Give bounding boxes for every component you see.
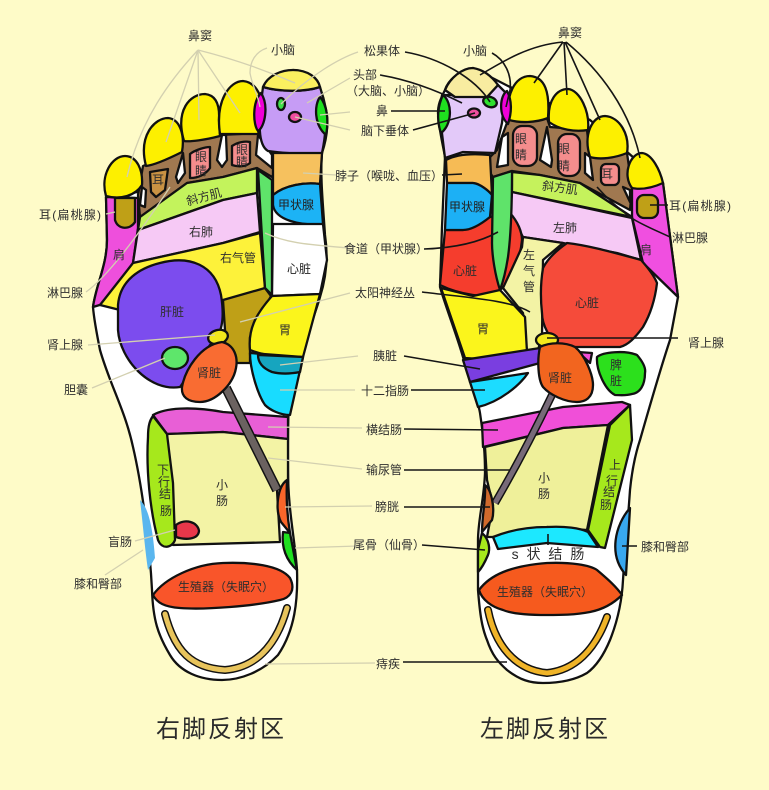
left foot labels: 肾脏 [548,370,572,385]
left foot labels: 管 [523,279,535,294]
eye 1 [190,147,210,178]
center labels: 松果体 [364,44,400,58]
center labels: 尾骨（仙骨） [353,538,425,552]
right foot labels: 肝脏 [160,304,184,319]
heart line [272,224,327,296]
ureter core [495,395,552,503]
left side labels: 胆囊 [64,382,88,397]
brown [488,118,632,210]
right foot labels: 肠 [216,494,228,508]
center labels: 太阳神经丛 [355,285,415,300]
right side labels: 膝和臀部 [641,539,689,554]
bladder [482,485,493,532]
ear box [601,164,619,185]
bladder [278,480,290,533]
left side labels: 肾上腺 [47,338,83,352]
center labels: 十二指肠 [361,383,409,398]
left foot labels: 上 [609,458,621,472]
center labels: 痔疾 [376,656,400,671]
kidney [182,342,237,402]
left foot labels: 肠 [600,498,612,512]
left foot labels: 肠 [538,487,550,501]
cyan duo [470,373,528,407]
kidney [538,343,593,402]
red heart small [440,213,522,295]
ureter [495,395,552,503]
left foot labels: 气 [523,263,535,278]
inner teal [258,355,303,374]
right foot labels: 甲状腺 [278,198,314,212]
right foot diagram [93,70,327,680]
left foot labels: s 状 结 肠 [512,546,586,562]
right foot labels: 眼 [195,150,207,164]
cap [445,68,498,97]
ureter [226,388,277,490]
olive area [223,288,271,363]
center labels: 膀胱 [375,499,399,514]
center labels: 头部 [353,67,377,82]
right foot labels: 结 [159,487,171,501]
dot pink [468,108,480,118]
right foot labels: 心脏 [287,261,311,276]
right foot labels [113,143,314,594]
ascending colon [588,405,632,548]
center labels: 脑下垂体 [361,124,409,138]
arc outer [488,610,607,673]
lilac toe [440,85,505,158]
right foot labels: 眼 [236,143,248,157]
tailbone [478,533,489,572]
olive ear [637,195,658,218]
left foot labels: 心脏 [575,295,599,310]
left side labels [39,28,295,591]
left side labels: 淋巴腺 [47,286,83,300]
green strip [258,170,272,295]
pink bit [578,352,592,363]
stomach [250,294,320,357]
olive ear area [115,198,135,228]
left foot labels: 小 [538,471,550,485]
big toe lilac [260,87,326,154]
right side labels: 淋巴腺 [672,231,708,245]
purple pancreas [463,348,540,382]
lung lime [138,168,257,230]
left foot diagram [438,68,678,683]
stomach [441,288,527,360]
eye 2 [232,142,250,166]
cap [263,70,320,91]
thyroid [273,183,323,224]
title: right foot: 右脚反射区 [156,716,286,743]
left foot labels: 眼 [515,132,527,146]
right foot labels: 生殖器（失眠穴） [178,579,274,594]
pale trachea [503,237,563,353]
big heart [541,243,657,347]
brown toe base [138,133,278,217]
left foot labels: 肩 [640,242,652,257]
lime [512,172,632,217]
right foot labels: 睛 [195,164,207,178]
left lung [510,192,641,260]
left foot labels: 眼 [558,142,570,156]
right foot labels: 右肺 [189,224,213,239]
s colon [493,527,598,549]
arc outer [165,608,287,670]
left side labels: 鼻窦 [188,28,212,43]
green side [316,97,327,135]
eye 2 [558,134,580,176]
toes [508,76,663,189]
center labels: 脖子（喉咙、血压） [335,169,443,183]
green [438,95,450,133]
right side labels: 鼻窦 [558,25,582,40]
right foot labels: 耳 [152,173,164,187]
descending colon [147,416,175,547]
right side labels: 肾上腺 [688,336,724,350]
green esoph [492,171,512,290]
shoulder [632,183,678,297]
tailbone [283,532,297,570]
magenta [254,93,265,131]
center labels [335,44,443,671]
genital [479,563,622,615]
neck [446,154,492,195]
small intestine [167,432,288,545]
left side labels: 膝和臀部 [74,576,122,591]
small intestine [485,425,608,537]
colon [482,402,630,447]
left foot labels: 左 [523,247,535,262]
liver [118,260,223,388]
left foot labels: 心脏 [453,263,477,278]
gray leader lines [86,48,375,664]
title: left foot: 左脚反射区 [480,716,610,743]
center labels: 横结肠 [366,423,402,437]
genital [153,563,292,609]
right foot labels: 下 [157,463,169,477]
right foot labels: 肾脏 [197,365,221,380]
right lung [133,193,260,263]
right foot labels: 肠 [160,504,172,518]
left side labels: 耳(扁桃腺) [39,207,101,222]
adrenal [536,333,558,347]
right foot labels: 斜方肌 [185,185,223,208]
left foot labels: 睛 [515,148,527,162]
left foot labels: 结 [603,485,615,499]
left foot labels: 生殖器（失眠穴） [497,584,593,599]
right side labels: 小脑 [463,44,487,58]
right foot labels: 肩 [113,247,125,262]
magenta [501,91,511,124]
spleen [597,352,645,395]
center labels: 输尿管 [366,462,402,477]
appendix [176,521,199,539]
right foot labels: 睛 [236,155,248,169]
left foot labels: 左肺 [553,220,577,235]
left foot labels: 斜方肌 [541,178,579,197]
toe gaps [140,135,272,207]
pineal dot [277,98,285,110]
black leader lines [380,42,678,662]
dot green [482,95,498,109]
right side labels [463,25,731,554]
right side labels: 耳(扁桃腺) [669,198,731,213]
toes [104,81,261,198]
eye 1 [513,126,537,166]
adrenal [207,328,229,346]
duodenum [250,353,303,415]
arc inner [488,610,607,673]
center labels: （大脑、小脑） [346,84,430,98]
colon [153,408,288,439]
right foot labels: 胃 [279,323,291,337]
right foot labels: 小 [216,478,228,492]
right foot labels: 右气管 [220,250,256,265]
left foot labels: 胃 [477,322,489,336]
knee [140,500,155,570]
center labels: 胰脏 [373,348,397,363]
center labels: 食道（甲状腺） [344,241,428,256]
left foot labels: 脾 [610,357,622,372]
left side labels: 小脑 [271,43,295,57]
thyroid [445,183,492,230]
right foot labels: 行 [158,475,170,489]
neck [273,153,322,195]
arc inner [165,608,287,670]
left foot labels: 甲状腺 [449,200,485,214]
gallbladder [162,347,188,369]
knee [615,508,630,575]
shoulder [93,197,138,307]
gaps [497,127,630,202]
left side labels: 盲肠 [108,534,132,549]
left foot labels: 行 [606,474,618,488]
left foot labels: 脏 [610,373,622,388]
left foot labels: 耳 [601,167,613,181]
center labels: 鼻 [376,103,388,118]
left foot labels [449,132,652,599]
left foot labels: 睛 [558,159,570,173]
nose dot [289,112,301,122]
trachea [100,233,265,330]
ureter core [226,388,277,490]
ear box [150,169,168,197]
